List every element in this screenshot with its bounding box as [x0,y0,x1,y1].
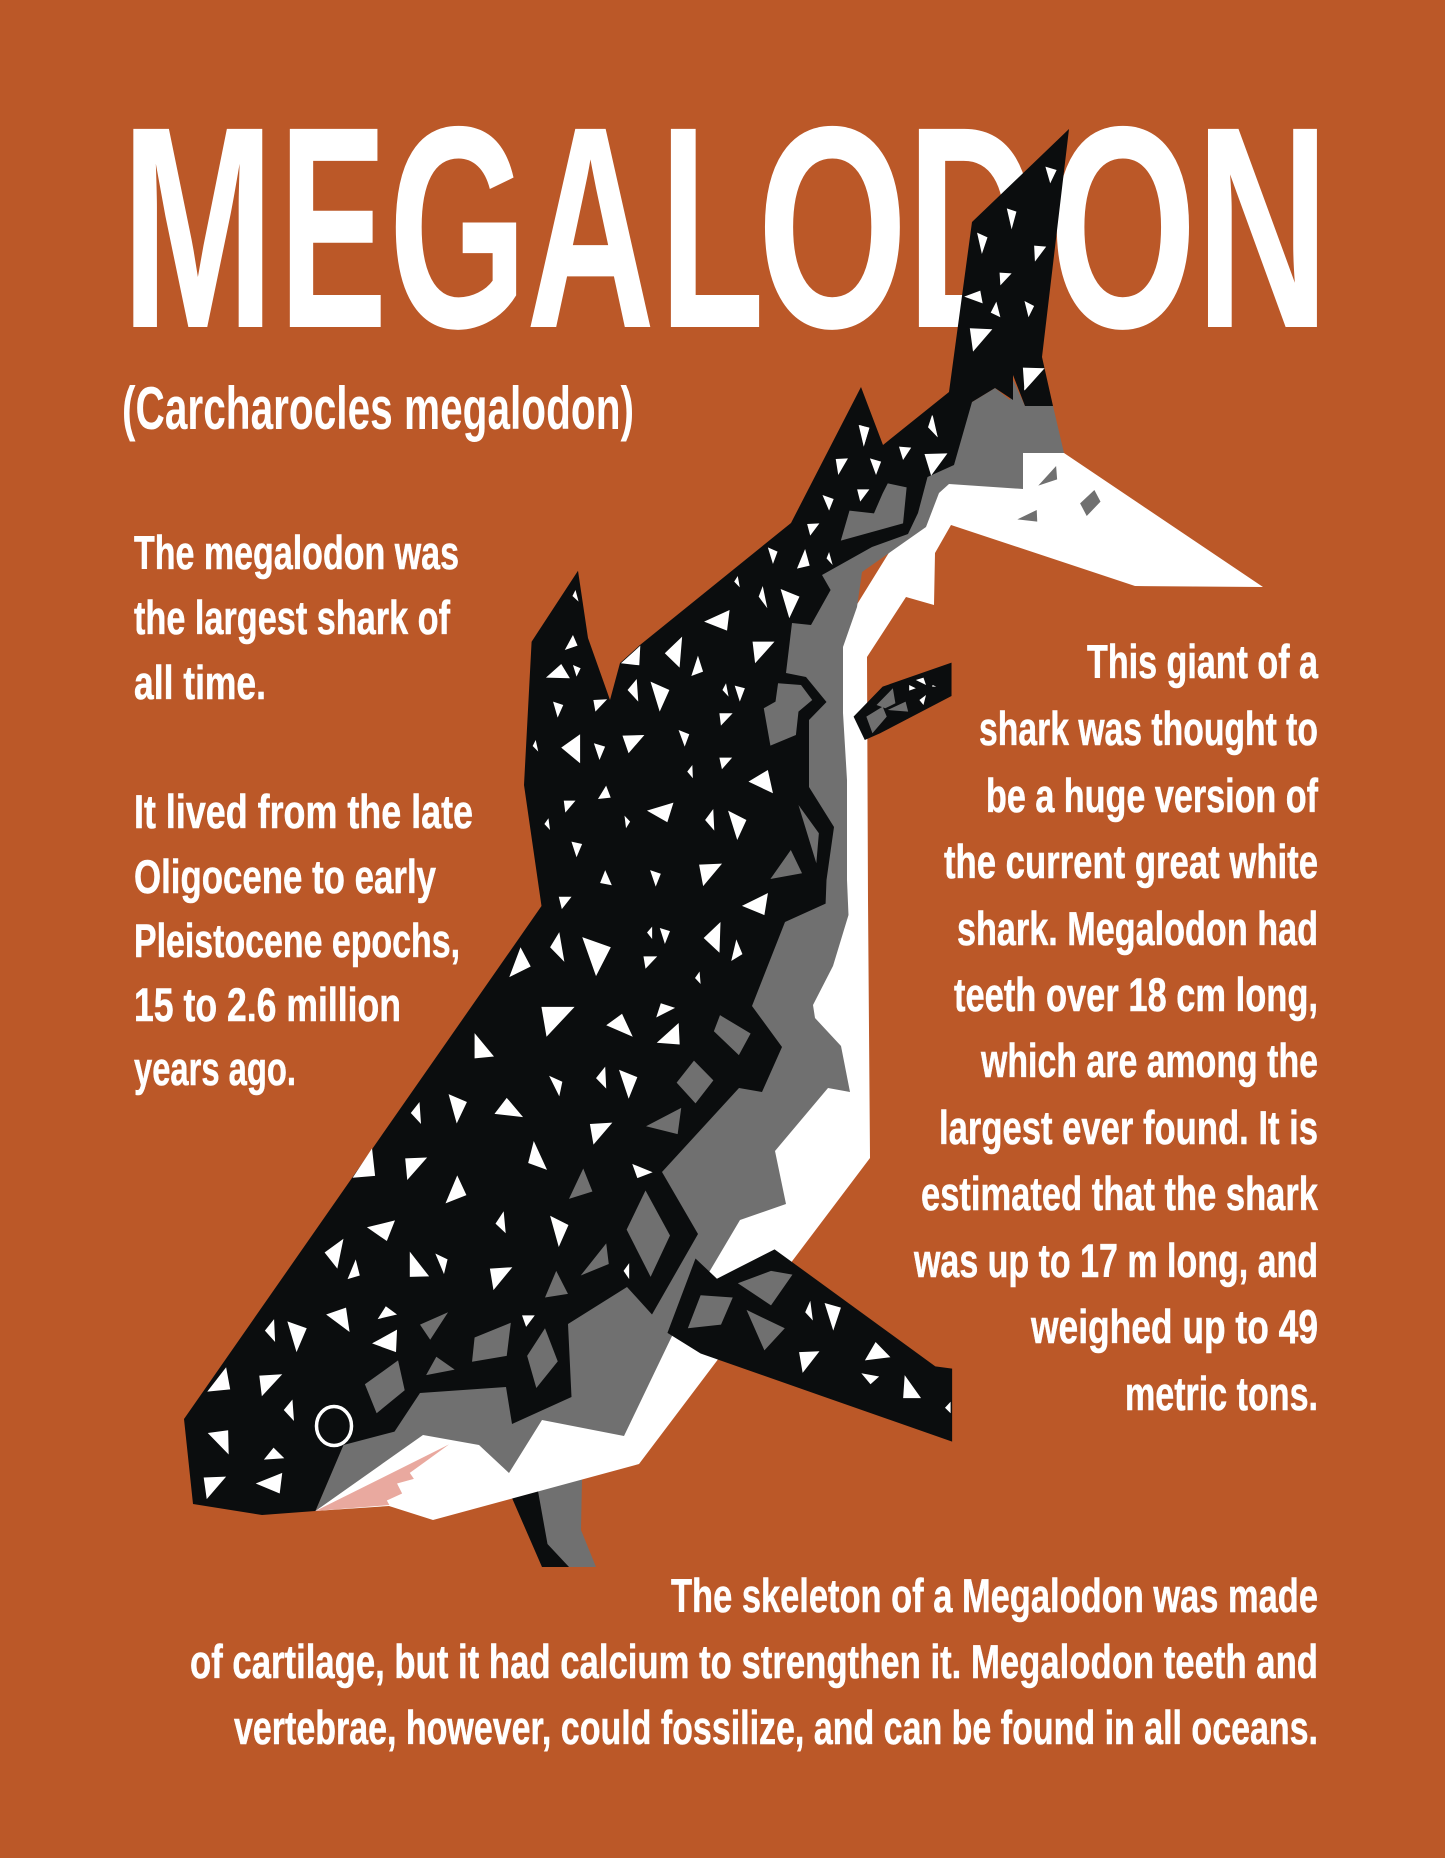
white belly and lower tail lobe [315,453,1263,1520]
text block: great white comparison right: metric tons. [1125,1367,1318,1420]
subtitle: scientific name: (Carcharocles megalodon) [122,375,634,442]
text block: intro left: The megalodon was [134,526,459,579]
title: L [659,67,764,389]
text block: great white comparison right [913,635,1319,1420]
text block: great white comparison right: shark. Megalodon had [957,902,1318,955]
white flecks on tail [964,167,1057,391]
text block: great white comparison right: the current great white [944,835,1318,888]
icon: eye [316,1406,352,1446]
text block: intro left [134,526,473,1095]
text block: skeleton bottom [190,1569,1318,1754]
text block: intro left: 15 to 2.6 million [134,978,401,1031]
grey patches on lower body [365,860,802,1413]
white flecks on dorsal fin [860,415,938,447]
title: O [1049,67,1197,389]
text block: great white comparison right: shark was thought to [979,702,1318,755]
title: E [279,67,387,389]
text block: intro left: It lived from the late [134,785,473,838]
title: O [757,67,908,389]
shark illustration [184,129,1263,1567]
text block: intro left: Pleistocene epochs, [134,914,460,967]
text block: great white comparison right: which are among the [980,1034,1318,1087]
small pectoral fin [854,663,952,740]
black body [184,129,1069,1515]
white flecks on lower body and head [204,864,768,1499]
text block: great white comparison right: teeth over 18 cm long, [954,968,1318,1021]
title: A [526,67,655,389]
grey flank [315,380,1064,1511]
title: M [121,67,275,389]
text block: intro left: all time. [134,656,266,709]
grey spots on lower tail lobe [1017,466,1101,522]
pelvic fin [512,1479,596,1567]
title: D [907,67,1038,389]
text block: great white comparison right: largest ever found. It is [939,1101,1318,1154]
title: N [1196,67,1329,389]
text block: intro left: Oligocene to early [134,850,436,903]
text block: intro left: years ago. [134,1042,296,1095]
title: G [388,67,527,389]
pink mouth [315,1444,449,1511]
text block: intro left: the largest shark of [134,591,450,644]
text block: great white comparison right: weighed up to 49 [1030,1300,1318,1353]
text block: great white comparison right: be a huge version of [986,769,1318,822]
large pectoral fin [667,1249,952,1442]
grey patches on upper body [764,483,907,879]
white flecks on upper body [533,380,1033,857]
text block: great white comparison right: This giant of a [1087,635,1319,688]
